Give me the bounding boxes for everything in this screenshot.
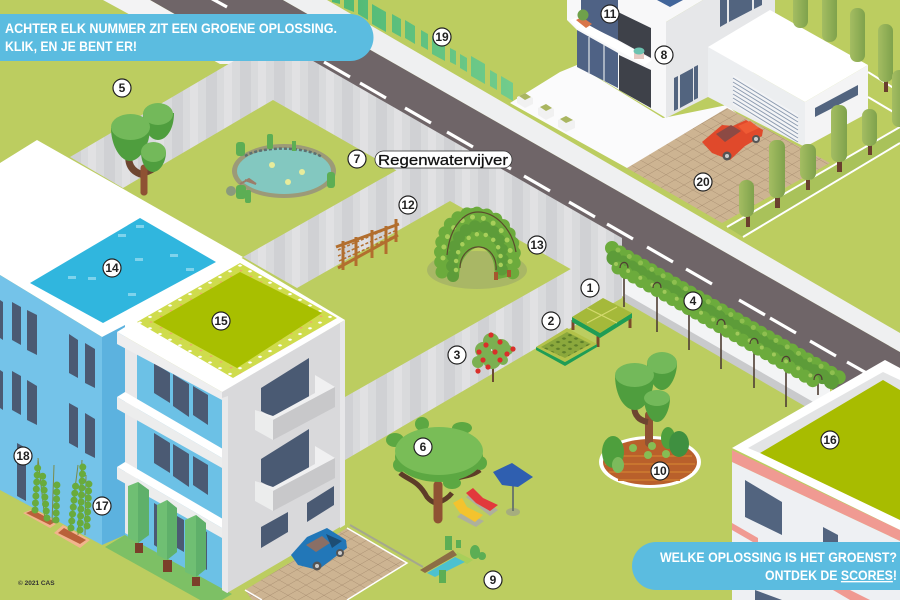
espalier trees 4 [612, 248, 840, 407]
banner: bottom right [632, 542, 900, 590]
sedum roof border [137, 263, 337, 378]
potted plant 8 [634, 48, 644, 59]
planters [517, 93, 575, 132]
garage door [733, 75, 798, 143]
banner: bottom right: ONTDEK DE SCORES! [765, 568, 897, 583]
tree 5 [111, 103, 174, 192]
driveway 20 [627, 108, 830, 223]
columnar trees [128, 482, 206, 586]
upper glazing [581, 0, 618, 40]
balcony upper [255, 375, 335, 420]
upper right window [720, 0, 762, 27]
vegetable bed 2 [536, 328, 597, 366]
recessed blue facade [125, 345, 222, 593]
raised bed 1 [572, 298, 632, 347]
number markers: 18 [16, 449, 30, 463]
garage [708, 10, 868, 147]
banner: top left: ACHTER ELK NUMMER ZIT EEN GROENE OPLOSSING. [5, 21, 337, 36]
rooftop water basin [30, 218, 216, 323]
number markers: 6 [420, 440, 427, 454]
hedge 19 [332, 0, 513, 101]
lily pads [269, 162, 305, 185]
apple tree 3 [472, 332, 516, 382]
number markers: 19 [435, 30, 449, 44]
sedum roof 15 [153, 272, 322, 368]
number markers: 9 [490, 573, 497, 587]
gray side wall [222, 323, 340, 593]
garage window [815, 85, 858, 117]
number markers: 1 [587, 281, 594, 295]
upper sidewalk [283, 0, 900, 352]
blue car [291, 528, 347, 570]
fence wall along road [622, 258, 830, 416]
solar panel [657, 0, 683, 7]
number markers: 3 [454, 348, 461, 362]
number markers: 17 [95, 499, 109, 513]
label: Regenwatervijver: Regenwatervijver [378, 152, 508, 169]
floor slabs [117, 392, 228, 458]
garden divider wall 12 [243, 140, 450, 288]
driveway bottom [245, 525, 423, 600]
road [150, 0, 900, 428]
big building 14 [0, 140, 243, 548]
shade tree 6 [386, 417, 487, 519]
number markers: 13 [530, 238, 544, 252]
number markers: 8 [661, 48, 668, 62]
number markers: 14 [105, 261, 119, 275]
number markers: 11 [604, 7, 617, 21]
house roof and left facade [567, 0, 703, 118]
lower glazing [577, 30, 618, 88]
garden divider wall 3 [345, 240, 622, 460]
pond plants [236, 134, 335, 203]
left column [125, 345, 137, 540]
sun loungers [453, 488, 498, 527]
balcony lower [255, 446, 335, 491]
number markers: 7 [354, 152, 361, 166]
big building 15 [105, 257, 345, 600]
shrubs [602, 436, 624, 468]
number markers: 10 [653, 464, 667, 478]
house side window [674, 65, 698, 111]
road drain [327, 8, 390, 44]
facade windows [0, 300, 95, 501]
rainwater pond 7 [226, 134, 336, 203]
garden bed tree 10 [599, 352, 701, 488]
wadi 9 [420, 536, 486, 583]
side windows [261, 358, 309, 417]
parasol [493, 463, 533, 516]
number markers: 15 [214, 314, 228, 328]
dark blue side [102, 325, 125, 545]
number markers: 2 [548, 314, 555, 328]
climbing plants 17 [35, 458, 89, 535]
banner: top left: KLIK, EN JE BENT ER! [5, 39, 137, 54]
number markers: 5 [119, 81, 126, 95]
potted plant 11 [576, 10, 592, 28]
lower sidewalk [103, 0, 262, 64]
number markers: 12 [401, 198, 415, 212]
plaza [510, 65, 750, 168]
living willow arch 13 [427, 208, 527, 289]
white house [510, 0, 775, 168]
number markers: 16 [823, 433, 837, 447]
building 16 [732, 360, 900, 600]
green strip with white edges [727, 72, 900, 237]
building 14 roof [0, 140, 243, 337]
number markers: 4 [690, 294, 697, 308]
banner: top left [0, 14, 374, 61]
trellis fence 12 [336, 219, 399, 270]
house right wall [666, 0, 775, 118]
back garden wall [70, 38, 622, 298]
planters [23, 509, 59, 528]
number markers: 20 [696, 175, 710, 189]
ground planting [105, 535, 232, 600]
cypress trees [739, 0, 900, 227]
copyright: © 2021 CAS [18, 579, 55, 587]
roof [117, 257, 345, 392]
red car [702, 120, 763, 160]
balcony slab [570, 18, 652, 65]
facade windows front [154, 363, 208, 570]
blue facade [0, 275, 102, 545]
